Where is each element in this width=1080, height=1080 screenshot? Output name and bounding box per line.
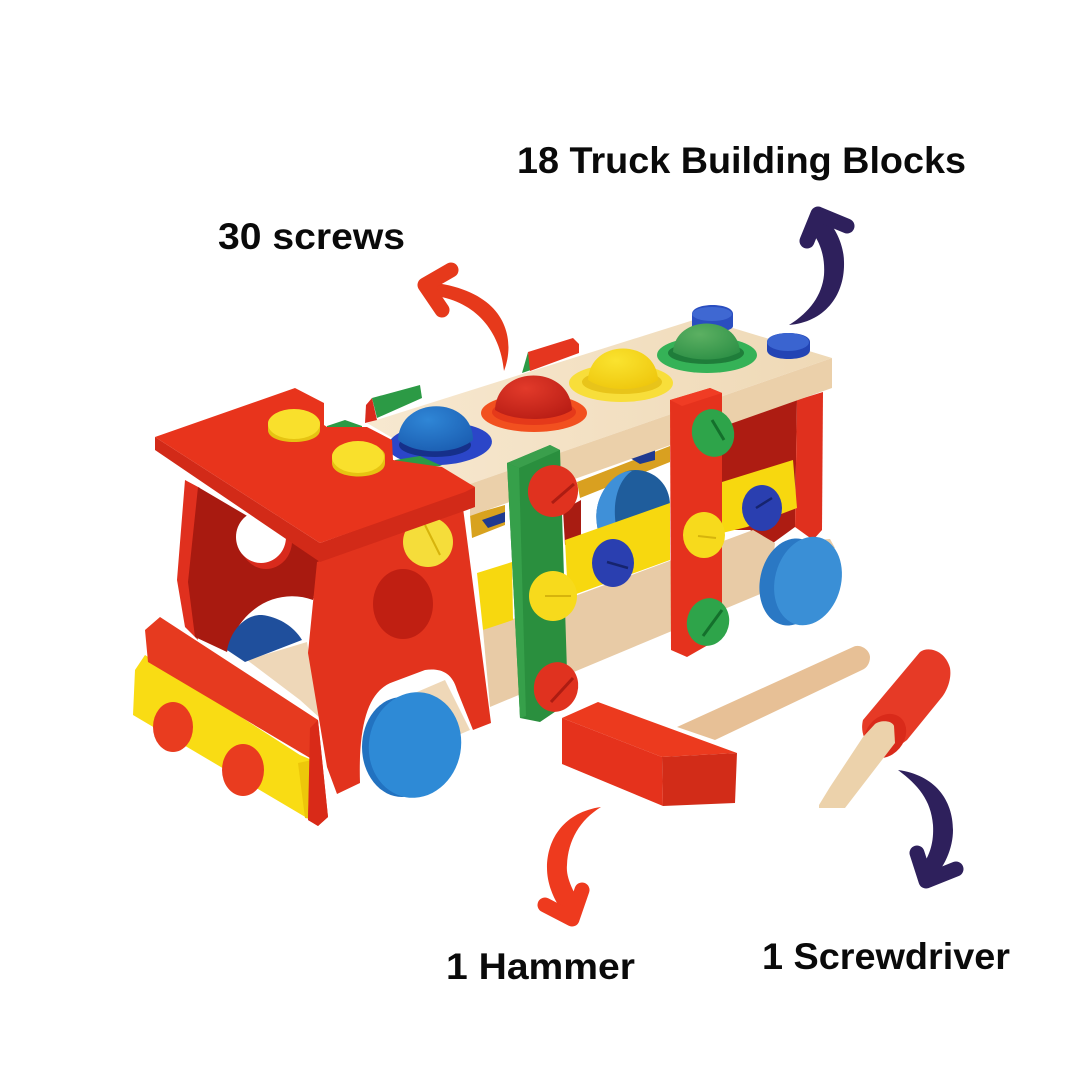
- green bits behind roof: [327, 420, 442, 468]
- cab side inner wall: [188, 487, 322, 652]
- yellow ball: [569, 348, 673, 402]
- truck cab: [155, 388, 491, 794]
- green top screw: [687, 404, 739, 462]
- arrow: to 18 truck building blocks: [789, 212, 847, 325]
- front blue wheel: [360, 685, 470, 805]
- wooden axle behind arch: [375, 680, 470, 760]
- wooden top plank: [367, 318, 832, 516]
- yellow roof screws: [268, 409, 385, 476]
- right bumper screw: [222, 744, 264, 796]
- red ball: [481, 376, 587, 432]
- cab roof: [155, 388, 475, 562]
- blue wheel behind cab: [227, 615, 302, 662]
- green front upright with screws: [507, 445, 584, 722]
- cab side outer edge: [177, 480, 200, 640]
- screwdriver shaft: [819, 721, 895, 808]
- rear blue wheel: [752, 529, 852, 633]
- axle tip: [815, 539, 835, 552]
- arrow: to 1 hammer: [545, 807, 601, 920]
- blue ball: [387, 406, 493, 468]
- yellow cab screw: [403, 517, 453, 567]
- hammer bench balls: [387, 324, 757, 468]
- yellow side beams: [477, 460, 797, 630]
- back block green: [365, 385, 422, 423]
- screwdriver collar: [855, 705, 915, 767]
- lower wooden beam: [483, 530, 775, 707]
- label: 1 hammer: 1 Hammer: [446, 946, 635, 987]
- front blue peg: [767, 333, 810, 359]
- red lower screw: [528, 657, 584, 717]
- arrow: to 30 screws: [425, 270, 508, 371]
- label: 1 screwdriver: 1 Screwdriver: [762, 936, 1010, 977]
- back block red: [522, 338, 579, 373]
- red bumper board: [145, 617, 328, 826]
- hammer handle: [677, 646, 870, 740]
- shadow strip under plank: [470, 446, 670, 545]
- blue right screw: [742, 485, 782, 531]
- arrow: to 1 screwdriver: [898, 770, 956, 884]
- hammer head: [562, 702, 737, 806]
- back blue peg: [692, 305, 733, 332]
- cab front panel: [308, 508, 491, 794]
- red top screw: [522, 459, 584, 523]
- left bumper screw: [153, 702, 193, 752]
- screwdriver: [819, 649, 950, 808]
- blue middle screw: [592, 539, 634, 587]
- side window hole: [236, 511, 292, 569]
- yellow screw: [529, 571, 577, 621]
- label: 18 truck building blocks: 18 Truck Building Blocks: [517, 140, 966, 181]
- label: 30 screws: 30 screws: [218, 216, 405, 257]
- wooden floor: [247, 642, 320, 718]
- rear support frame: [722, 392, 823, 543]
- hammer: [562, 646, 870, 806]
- back wheel: [596, 470, 670, 545]
- yellow middle screw: [683, 512, 725, 558]
- round cab hole: [373, 569, 433, 639]
- toy truck: [133, 305, 852, 826]
- front bumper: [133, 617, 328, 826]
- screwdriver handle: [862, 649, 950, 753]
- yellow bumper board: [133, 655, 317, 820]
- green ball: [657, 324, 757, 373]
- green lower screw: [682, 593, 734, 651]
- red rear upright with screws: [670, 388, 739, 657]
